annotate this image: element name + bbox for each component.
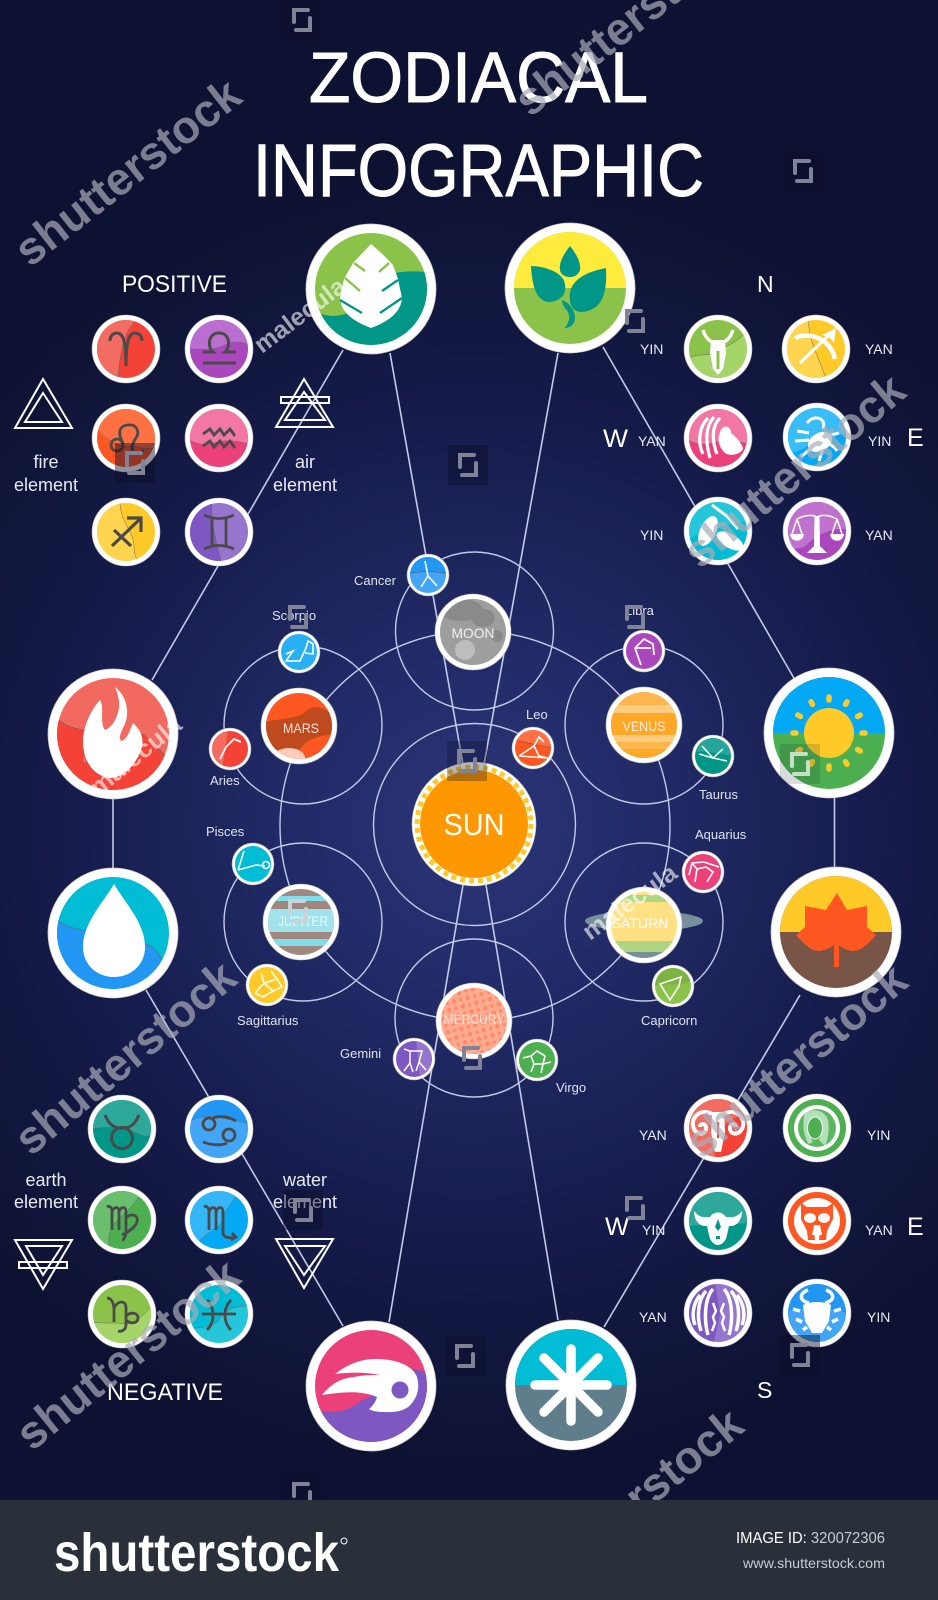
- sign: taurus bull: [684, 1187, 752, 1255]
- water element label: [273, 1170, 337, 1212]
- constellation labels: Libra: [625, 603, 655, 618]
- icon: plant big circle: [505, 223, 635, 353]
- fire element label: fire: [33, 452, 59, 472]
- panel: south figures: [605, 1094, 924, 1403]
- earth element label: [14, 1170, 78, 1212]
- air element label: [273, 452, 337, 495]
- planet: venus: [606, 687, 682, 763]
- icon: water big circle: [48, 868, 178, 998]
- shutterstock watermark text: shutterstock: [4, 950, 246, 1165]
- compass and yin yan labels south: YIN: [642, 1222, 665, 1238]
- compass and yin yan labels north: YIN: [640, 341, 663, 357]
- constellation labels: Cancer: [354, 573, 397, 588]
- malecula watermark text: malecula: [577, 858, 683, 946]
- sign: cancer crab: [783, 403, 851, 471]
- compass and yin yan labels south: YIN: [867, 1309, 890, 1325]
- compass and yin yan labels north: YAN: [865, 341, 893, 357]
- planet: mars: [261, 688, 337, 768]
- compass and yin yan labels south: [605, 1127, 924, 1403]
- sign: gemini twins: [684, 1279, 752, 1347]
- sign: capricorn glyph: [88, 1280, 156, 1348]
- footer url: www.shutterstock.com: [742, 1555, 885, 1571]
- malecula watermark text: [84, 271, 683, 946]
- planet: saturn: [585, 887, 703, 963]
- icon: air leaf big circle: [306, 224, 436, 354]
- shutterstock watermark text: shutterstock: [6, 1248, 250, 1460]
- footer registered mark: [341, 1538, 347, 1544]
- sign: sagittarius glyph: [92, 498, 160, 566]
- sign: pisces fish: [684, 497, 752, 565]
- constellation labels: Pisces: [206, 824, 245, 839]
- constellation labels: Scorpio: [272, 608, 316, 623]
- panel: north figures: [603, 271, 924, 565]
- constellation: aries: [209, 728, 251, 770]
- planet: jupiter: JUPITER: [278, 913, 328, 929]
- sign: gemini glyph: [185, 498, 253, 566]
- sign: leo glyph: [92, 404, 160, 472]
- icon: comet big circle: [306, 1321, 436, 1451]
- constellation: taurus: [692, 735, 734, 777]
- air element label: air: [295, 452, 315, 472]
- watermark marks: [115, 0, 823, 1514]
- sign: pisces glyph: [185, 1280, 253, 1348]
- panel: negative signs: [14, 1095, 337, 1406]
- compass and yin yan labels north: YIN: [640, 527, 663, 543]
- heading: positive: POSITIVE: [122, 271, 227, 298]
- constellation labels: Leo: [526, 707, 548, 722]
- sign: virgo maiden: [783, 1094, 851, 1162]
- shutterstock watermark text: shutterstock: [673, 363, 915, 578]
- constellation: aquarius: [682, 851, 724, 893]
- sign: aquarius glyph: [185, 404, 253, 472]
- constellation labels: Gemini: [340, 1046, 381, 1061]
- title: INFOGRAPHIC: [253, 129, 704, 212]
- panel: positive signs: [14, 271, 337, 566]
- sign: sagittarius bow: [782, 315, 850, 383]
- compass and yin yan labels north: YAN: [865, 527, 893, 543]
- compass and yin yan labels south: YAN: [865, 1222, 893, 1238]
- compass and yin yan labels north: YAN: [638, 433, 666, 449]
- water element label: water: [282, 1170, 327, 1190]
- constellation: libra: [623, 630, 665, 672]
- sign: taurus glyph: [88, 1095, 156, 1163]
- sign: scorpio glyph: [185, 1186, 253, 1254]
- footer bar: [0, 1500, 938, 1600]
- constellation: gemini: [393, 1038, 435, 1080]
- constellation labels: Taurus: [699, 787, 739, 802]
- sign: aries ram: [684, 1094, 752, 1162]
- constellation labels: Aries: [210, 773, 240, 788]
- constellation: scorpio: [278, 631, 320, 673]
- sun: SUN: [444, 807, 504, 842]
- fire element label: element: [14, 475, 78, 495]
- constellation: virgo: [516, 1039, 558, 1081]
- planet: moon: [435, 594, 511, 670]
- sign: libra glyph: [185, 315, 253, 383]
- heading: negative: NEGATIVE: [107, 1379, 223, 1406]
- planet: mars: MARS: [283, 720, 319, 736]
- earth element label: element: [14, 1192, 78, 1212]
- sign: libra scales: [783, 497, 851, 565]
- compass and yin yan labels south: YAN: [639, 1127, 667, 1143]
- compass and yin yan labels south: YIN: [867, 1127, 890, 1143]
- constellation labels: Virgo: [556, 1080, 586, 1095]
- compass and yin yan labels south: W: [605, 1213, 629, 1241]
- compass and yin yan labels south: S: [757, 1377, 772, 1403]
- sign: capricorn goat: [684, 315, 752, 383]
- planet: moon: MOON: [452, 625, 494, 641]
- sign: leo lion: [783, 1187, 851, 1255]
- sign: cancer glyph: [185, 1095, 253, 1163]
- planet: jupiter: [263, 884, 339, 960]
- icon: fire big circle: [48, 669, 178, 799]
- constellation: pisces: [232, 843, 274, 885]
- compass and yin yan labels north: W: [603, 425, 628, 453]
- sign: aries glyph: [92, 315, 160, 383]
- shutterstock watermark text: shutterstock: [4, 67, 251, 276]
- water element label: element: [273, 1192, 337, 1212]
- fire element label: [14, 452, 78, 495]
- planet: saturn: SATURN: [612, 915, 668, 931]
- footer logo: shutterstock: [54, 1523, 340, 1583]
- icon: summer sun big circle: [764, 668, 894, 798]
- planet: mercury: [436, 983, 512, 1059]
- compass and yin yan labels south: E: [907, 1213, 924, 1241]
- planet: venus: VENUS: [622, 718, 666, 734]
- sun: [412, 762, 536, 886]
- earth element label: earth: [25, 1170, 67, 1190]
- constellation labels: [206, 573, 747, 1095]
- constellation: capricorn: [652, 965, 694, 1007]
- compass and yin yan labels north: E: [907, 424, 924, 452]
- constellation: cancer: [407, 554, 449, 596]
- sign: virgo glyph: [88, 1186, 156, 1254]
- footer image id: IMAGE ID: 320072306: [736, 1530, 885, 1547]
- title: [253, 39, 704, 212]
- icon: winter asterisk big circle: [506, 1320, 636, 1450]
- connector lines between elements and sun: [113, 347, 834, 1327]
- compass and yin yan labels north: YIN: [868, 433, 891, 449]
- compass and yin yan labels north: N: [757, 271, 774, 297]
- air element label: element: [273, 475, 337, 495]
- malecula watermark text: malecula: [84, 710, 188, 802]
- icon: earth triangle: [15, 1240, 72, 1289]
- icon: fire triangle: [15, 379, 72, 428]
- icon: air triangle: [276, 379, 333, 427]
- constellation labels: Sagittarius: [237, 1013, 299, 1028]
- constellation labels: Aquarius: [695, 827, 747, 842]
- sign: aquarius water bearer: [684, 404, 752, 472]
- shutterstock watermark text: shutterstock: [675, 953, 917, 1168]
- compass and yin yan labels north: [603, 271, 924, 543]
- icon: autumn maple big circle: [771, 867, 901, 997]
- constellation: sagittarius: [246, 964, 288, 1006]
- sign: scorpio scorpion: [783, 1279, 851, 1347]
- constellation: leo: [512, 727, 554, 769]
- title: ZODIACAL: [309, 39, 648, 118]
- planet: mercury: MERCURY: [444, 1011, 505, 1027]
- icon: water triangle: [276, 1239, 333, 1288]
- compass and yin yan labels south: YAN: [639, 1309, 667, 1325]
- orbit rings: [224, 552, 723, 1097]
- constellation labels: Capricorn: [641, 1013, 697, 1028]
- malecula watermark text: malecula: [249, 271, 352, 359]
